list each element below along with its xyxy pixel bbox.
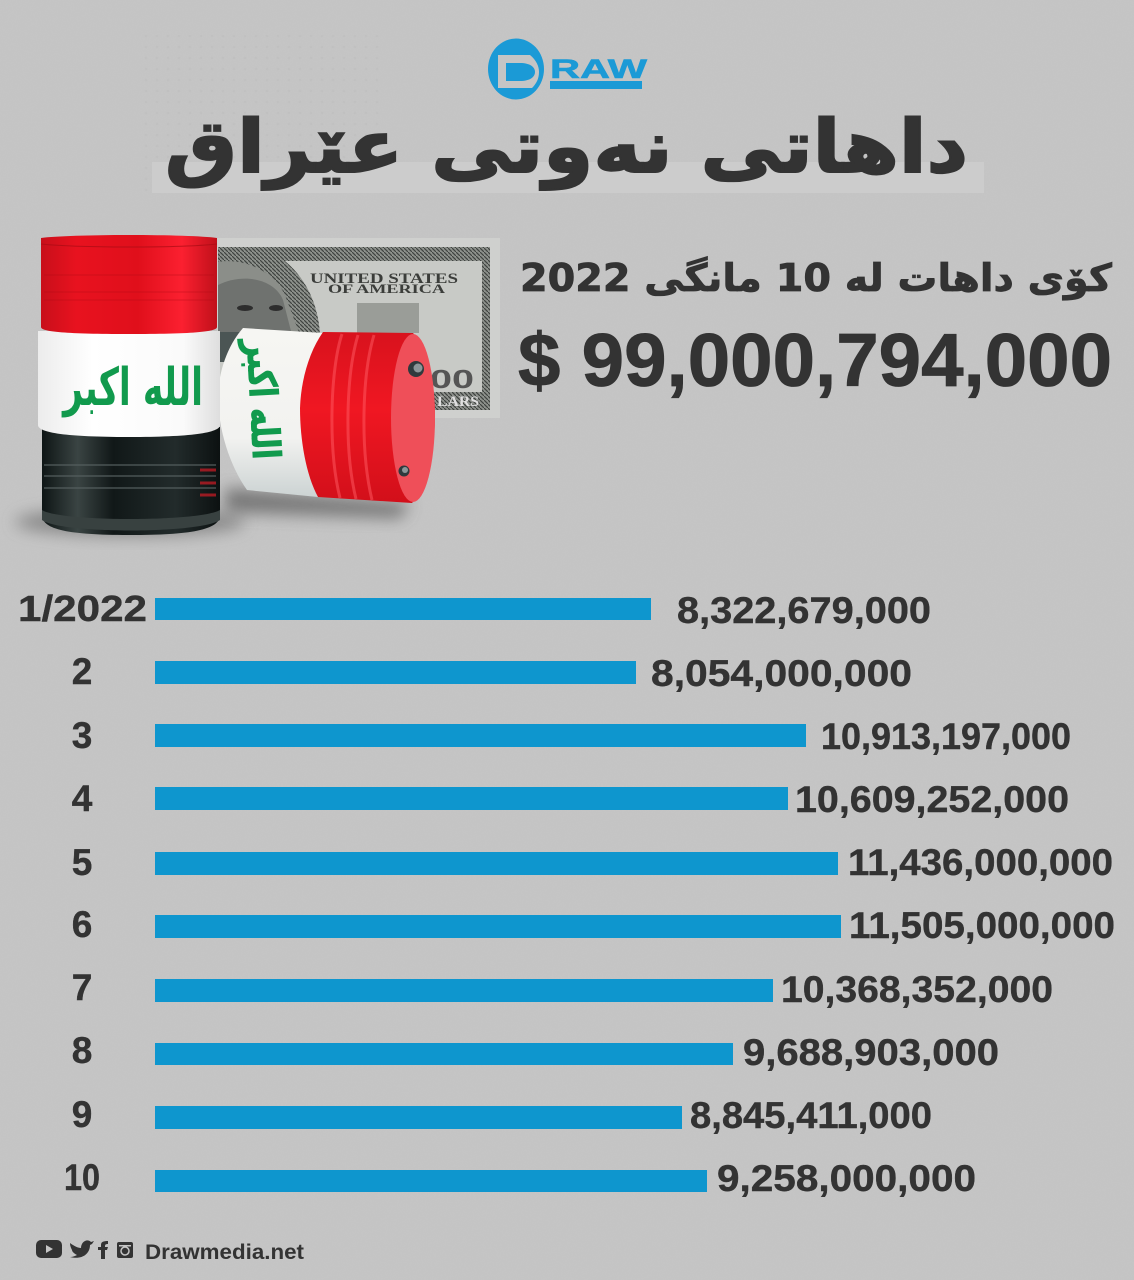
row 1 [18,588,931,631]
footer: social icons and site [36,1240,304,1264]
row 3: 10,913,197,000 [821,716,1071,757]
row 1: 8,322,679,000 [677,590,931,631]
row 7 [72,967,1053,1010]
icon: twitter [70,1240,94,1258]
barrel lettering: الله اكبر [61,358,203,418]
row 5: 11,436,000,000 [848,842,1113,883]
image: oil barrels and dollar bill [15,235,500,536]
row 9: 9 [72,1094,92,1135]
dollar bill [217,238,500,418]
title: داهاتی نەوتی عێراق [165,105,968,190]
row 9 [72,1094,932,1136]
site name: Drawmedia.net [145,1241,304,1264]
row 6 [72,904,1115,946]
row 8: 8 [72,1030,92,1071]
icon: facebook [98,1241,108,1259]
row 3 [72,715,1071,757]
dollar bill: UNITED STATES [310,271,458,287]
logo: Draw: RAW [550,54,648,84]
total amount: $ 99,000,794,000 [518,318,1112,402]
dollar bill: LARS [437,394,479,410]
logo: Draw [488,38,648,100]
dollar bill: OF AMERICA [328,281,446,296]
row 7: 10,368,352,000 [781,969,1053,1010]
row 10: 9,258,000,000 [717,1158,976,1199]
row 8: 9,688,903,000 [743,1032,999,1073]
icon: youtube [36,1240,62,1258]
bar chart [18,588,1115,1199]
row 2 [72,651,912,694]
row 6: 6 [72,904,92,945]
row 1: 1/2022 [18,588,147,629]
row 4: 10,609,252,000 [795,779,1069,820]
row 10 [64,1157,976,1199]
row 6: 11,505,000,000 [849,905,1115,946]
row 9: 8,845,411,000 [690,1095,932,1136]
row 8 [72,1030,999,1073]
title band [152,162,984,193]
row 10: 10 [64,1157,100,1198]
row 5 [72,842,1113,883]
row 5: 5 [72,842,92,883]
row 4: 4 [72,778,93,819]
total caption: کۆی داهات لە 10 مانگی 2022 [520,256,1113,300]
floor shadow [15,488,410,536]
lying barrel [218,328,435,503]
row 2: 8,054,000,000 [651,653,912,694]
icon: instagram [117,1242,133,1258]
row 3: 3 [72,715,92,756]
row 2: 2 [72,651,92,692]
row 4 [72,778,1069,820]
dollar bill: 00 [430,364,474,394]
barrel lettering: الله اكبر [238,337,288,460]
standing barrel [38,235,220,535]
row 7: 7 [72,967,92,1008]
